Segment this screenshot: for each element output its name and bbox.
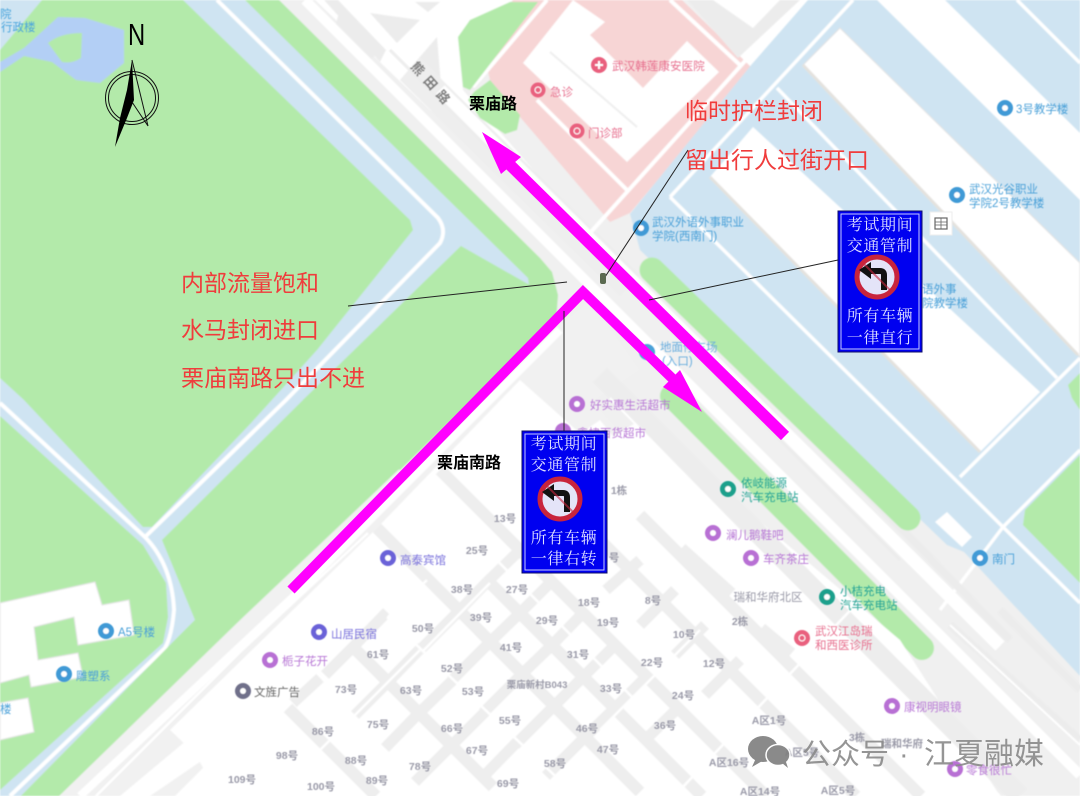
POI: clinic: 武汉江岛瑞 bbox=[815, 624, 872, 638]
POI: partially hidden building: 语外事 bbox=[922, 283, 956, 296]
house numbers: 58号 bbox=[544, 758, 566, 770]
house numbers: 8号 bbox=[645, 595, 661, 607]
POI: parking bbox=[639, 340, 718, 368]
sign: turn right: 考试期间 bbox=[531, 435, 597, 453]
house numbers: 29号 bbox=[536, 615, 558, 627]
house numbers: 61号 bbox=[367, 649, 389, 661]
house numbers: 33号 bbox=[600, 683, 622, 695]
POI: charging station: 依岐能源 bbox=[741, 476, 787, 490]
POI: south-west gate: 武汉外语外事职业 bbox=[652, 216, 744, 229]
POI: clinic bbox=[794, 624, 873, 652]
house numbers: 86号 bbox=[312, 726, 334, 738]
north arrow: N bbox=[128, 17, 145, 52]
green corner lawn east bbox=[1023, 455, 1080, 583]
house numbers: 39号 bbox=[470, 612, 492, 624]
house numbers: 22号 bbox=[641, 657, 663, 669]
teaching zone water bbox=[630, 0, 1080, 676]
campus roads white bbox=[0, 0, 443, 796]
house numbers: 55号 bbox=[499, 715, 521, 727]
house numbers: 19号 bbox=[597, 617, 619, 629]
watermark: · bbox=[899, 739, 909, 771]
house numbers: 73号 bbox=[335, 684, 357, 696]
house numbers: 69号 bbox=[497, 778, 519, 790]
house numbers: 78号 bbox=[409, 761, 431, 773]
house numbers: 109号 bbox=[228, 774, 256, 786]
POI: partial label: 楼 bbox=[0, 702, 12, 716]
icon: map scan button bbox=[930, 212, 952, 235]
house numbers: 2栋 bbox=[732, 615, 749, 628]
leader line: inner traffic note bbox=[348, 282, 567, 306]
house numbers: 89号 bbox=[366, 775, 388, 787]
hospital buildings bbox=[523, 0, 719, 162]
POI: homestay: 山居民宿 bbox=[331, 627, 377, 641]
house numbers: 67号 bbox=[466, 745, 488, 757]
sign: go straight: 所有车辆 bbox=[847, 307, 913, 325]
leader line: sign 2 bbox=[563, 311, 565, 432]
house numbers: 31号 bbox=[567, 649, 589, 661]
POI: homestay bbox=[311, 624, 377, 641]
house numbers: 号 bbox=[609, 552, 619, 564]
house numbers: 100号 bbox=[307, 781, 335, 793]
residential gray grid bbox=[288, 470, 921, 796]
house numbers: 瑞和华府 bbox=[881, 737, 923, 750]
house numbers: 41号 bbox=[500, 642, 522, 654]
POI: hotel bbox=[380, 550, 446, 567]
house numbers: 3栋 bbox=[849, 731, 866, 744]
POI: emergency: 急诊 bbox=[550, 85, 573, 99]
POI: shoe bar bbox=[705, 525, 784, 542]
POI: shoe bar: 澜儿鹅鞋吧 bbox=[726, 528, 784, 542]
main road lanes bbox=[305, 0, 1080, 775]
POI: emergency bbox=[530, 82, 573, 99]
house numbers: 38号 bbox=[451, 584, 473, 596]
residential block white base bbox=[170, 380, 1000, 796]
POI: parking: (入口) bbox=[662, 355, 693, 368]
sign: turn right: 所有车辆 bbox=[531, 529, 597, 547]
house numbers: 瑞和华府北区 bbox=[734, 590, 802, 604]
lake bbox=[0, 0, 42, 42]
house numbers: 25号 bbox=[466, 545, 488, 557]
house numbers: 52号 bbox=[441, 663, 463, 675]
white paths in teaching zone bbox=[670, 0, 1080, 610]
icon: wechat bbox=[748, 736, 790, 768]
green lawn: upper left bbox=[0, 0, 413, 527]
arrow: Limiao Road bbox=[482, 132, 785, 436]
label: top-left campus: 行政楼 bbox=[1, 20, 36, 34]
POI: teaching building 3 bbox=[997, 100, 1069, 116]
POI: teaching building 2: 学院2号教学楼 bbox=[969, 196, 1045, 210]
house numbers: 50号 bbox=[412, 623, 434, 635]
street label rotated: 熊田路 bbox=[408, 59, 457, 111]
POI: partially hidden building: 院教学楼 bbox=[922, 296, 968, 310]
watermark bbox=[748, 736, 1044, 771]
green lawn: lower left bbox=[0, 416, 168, 790]
green median strips bbox=[652, 270, 922, 648]
text: inner traffic note: 栗庙南路只出不进 bbox=[181, 365, 365, 391]
watermark: 江夏融媒 bbox=[924, 738, 1044, 771]
POI: south-west gate: 学院(西南门) bbox=[652, 229, 717, 243]
house numbers: 1栋 bbox=[611, 484, 628, 497]
POI: teaching building 2: 武汉光谷职业 bbox=[969, 182, 1038, 196]
road lanes top area bbox=[315, 0, 560, 200]
POI: small orange charging: 汽车充电站 bbox=[840, 598, 898, 612]
POI: flower shop: 栀子花开 bbox=[282, 654, 328, 668]
south-east gray road bbox=[600, 375, 1020, 796]
house numbers: 47号 bbox=[597, 744, 619, 756]
north arrow bbox=[106, 17, 158, 147]
icon: no left turn bbox=[540, 479, 580, 519]
sign: go straight bbox=[838, 211, 922, 352]
POI: hospital: 武汉韩莲康安医院 bbox=[612, 59, 705, 73]
text: inner traffic note: 内部流量饱和 bbox=[181, 270, 319, 296]
house numbers: 98号 bbox=[276, 750, 298, 762]
house numbers: 27号 bbox=[506, 584, 528, 596]
POI: sculpture department bbox=[56, 666, 110, 683]
POI: A5 building bbox=[98, 623, 156, 639]
POI: parking: 地面停车场 bbox=[660, 340, 718, 354]
residential parcels white bbox=[403, 433, 510, 550]
house numbers: A区1号 bbox=[752, 715, 786, 727]
leader line: sign 1 bbox=[649, 260, 838, 300]
POI: small orange charging bbox=[819, 584, 898, 612]
POI: tea house: 车齐茶庄 bbox=[763, 552, 809, 566]
house numbers: 13号 bbox=[494, 513, 516, 525]
street name: Limiao South Road: 栗庙南路 bbox=[437, 453, 501, 472]
street name: Limiao Road: 栗庙路 bbox=[469, 94, 517, 113]
house numbers: 栗庙新村B043 bbox=[507, 679, 567, 691]
house numbers: 63号 bbox=[400, 685, 422, 697]
leader line: guardrail note bbox=[605, 150, 688, 277]
house numbers: 12号 bbox=[703, 658, 725, 670]
POI: partially hidden building bbox=[922, 283, 968, 310]
house numbers: 24号 bbox=[672, 690, 694, 702]
white campus buildings bbox=[0, 582, 134, 687]
POI: teaching building 2 bbox=[949, 182, 1045, 210]
house numbers: 75号 bbox=[367, 719, 389, 731]
POI: charging station: 汽车充电站 bbox=[741, 490, 799, 504]
sign: turn right: 交通管制 bbox=[531, 456, 597, 474]
house numbers bbox=[228, 484, 923, 796]
sign: turn right bbox=[522, 431, 607, 573]
house numbers: 36号 bbox=[654, 720, 676, 732]
POI: south gate: 南门 bbox=[992, 552, 1015, 566]
POI: supermarket: 好实惠生活超市 bbox=[590, 398, 670, 412]
pink hospital compound bbox=[483, 0, 752, 222]
POI: snack shop bbox=[947, 761, 1012, 777]
POI: hospital bbox=[591, 57, 705, 73]
text: guardrail note: 临时护栏封闭 bbox=[685, 98, 823, 124]
label: top-left campus bbox=[0, 7, 36, 34]
icon: guardrail marker bbox=[600, 273, 606, 284]
arrow: Limiao South Road turning south-east bbox=[291, 292, 702, 590]
POI: department store bbox=[555, 423, 646, 440]
POI: south gate bbox=[972, 550, 1015, 566]
POI: A5 building: A5号楼 bbox=[118, 625, 156, 639]
POI: optical shop bbox=[884, 698, 962, 714]
POI: department store: 鑫棣百货超市 bbox=[577, 426, 646, 440]
POI: charging station bbox=[720, 476, 799, 504]
label: top-left campus: 院 bbox=[0, 7, 12, 21]
POI: outpatient: 门诊部 bbox=[588, 126, 622, 140]
house numbers: 46号 bbox=[576, 723, 598, 735]
green patches near hospital bbox=[458, 2, 538, 90]
watermark: 公众号 bbox=[802, 739, 889, 771]
POI: teaching building 3: 3号教学楼 bbox=[1016, 102, 1069, 116]
sign: turn right: 一律右转 bbox=[531, 550, 597, 568]
POI: tea house bbox=[743, 550, 809, 566]
house numbers: 53号 bbox=[462, 686, 484, 698]
POI: flower shop bbox=[262, 652, 328, 668]
sign: go straight: 交通管制 bbox=[847, 237, 913, 255]
POI: snack shop: 零食很忙 bbox=[966, 763, 1012, 777]
icon: no left turn bbox=[857, 257, 897, 297]
POI: supermarket bbox=[569, 396, 670, 412]
text: inner traffic note: 水马封闭进口 bbox=[181, 317, 319, 343]
sign: go straight: 考试期间 bbox=[847, 216, 913, 234]
sign: go straight: 一律直行 bbox=[847, 329, 913, 347]
house numbers: 66号 bbox=[441, 723, 463, 735]
POI: south-west gate bbox=[633, 216, 744, 243]
POI: advertising bbox=[235, 683, 300, 699]
house numbers: 88号 bbox=[345, 755, 367, 767]
POI: hotel: 高泰宾馆 bbox=[400, 553, 446, 567]
house numbers: A区5号 bbox=[785, 747, 819, 759]
POI: outpatient bbox=[570, 124, 622, 140]
gray corner bbox=[687, 0, 800, 58]
white teaching buildings bbox=[877, 0, 1080, 200]
text: guardrail note: 留出行人过街开口 bbox=[685, 147, 869, 173]
house numbers: A区16号 bbox=[709, 757, 749, 769]
compound roads bbox=[473, 0, 800, 233]
POI: sculpture department: 雕塑系 bbox=[76, 669, 110, 683]
POI: optical shop: 康视明眼镜 bbox=[904, 700, 962, 714]
south-west road band bbox=[59, 300, 640, 796]
POI: advertising: 文旌广告 bbox=[254, 685, 300, 699]
house numbers: 10号 bbox=[673, 629, 695, 641]
green lawn: centre wedge bbox=[21, 0, 558, 796]
POI: small orange charging: 小桔充电 bbox=[840, 584, 886, 598]
POI: clinic: 和西医诊所 bbox=[815, 638, 873, 652]
canal water base bbox=[0, 0, 545, 796]
house numbers: 18号 bbox=[578, 597, 600, 609]
